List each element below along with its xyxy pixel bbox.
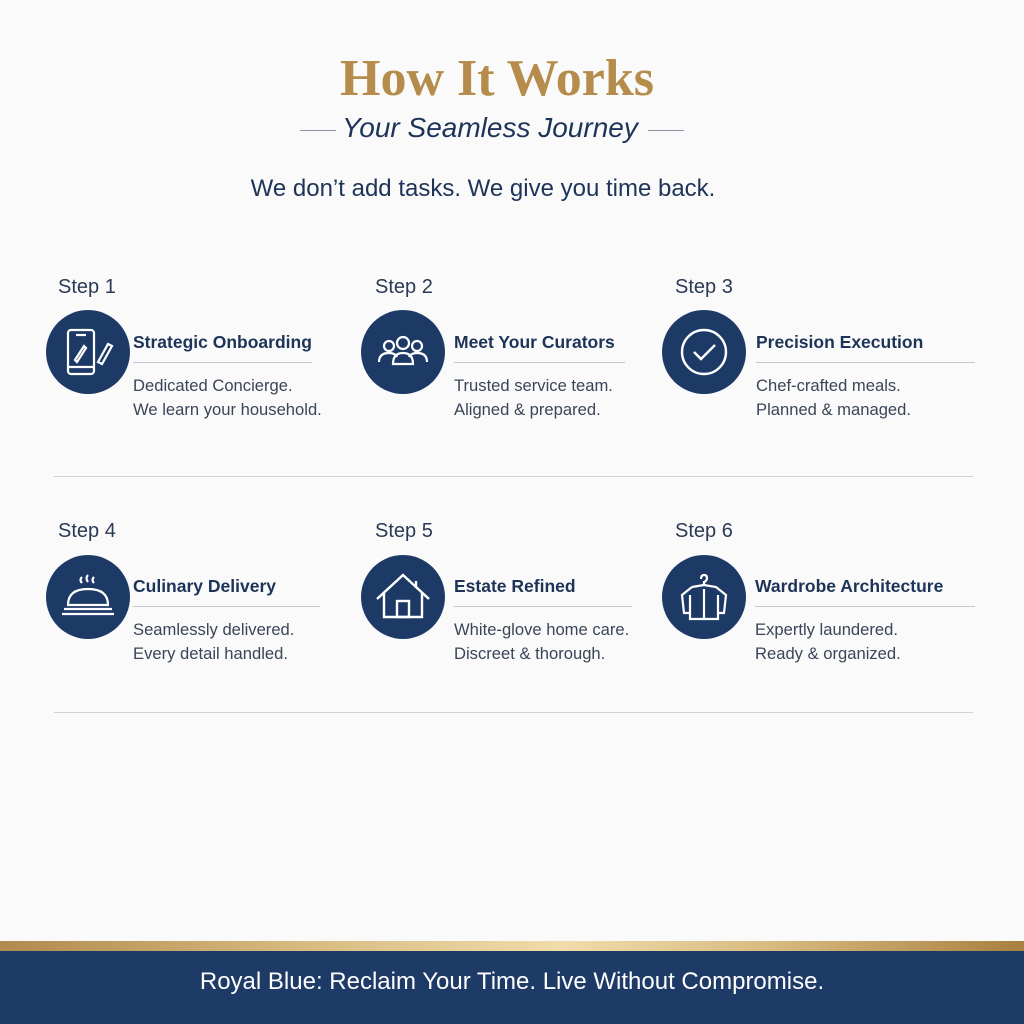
step 1: Step 1 (58, 276, 116, 298)
tagline: We don’t add tasks. We give you time back. (251, 175, 715, 202)
step 4: Seamlessly delivered. (133, 620, 294, 639)
step 2: Step 2 (375, 276, 433, 298)
step 2 (361, 276, 625, 419)
step 4: Step 4 (58, 520, 116, 542)
step 6: Step 6 (675, 520, 733, 542)
step 3 (662, 276, 975, 419)
footer banner: Royal Blue: Reclaim Your Time. Live Without Compromise. (200, 968, 824, 995)
step 1: Strategic Onboarding (133, 332, 312, 352)
title: How It Works (340, 50, 654, 107)
step 4: Culinary Delivery (133, 576, 276, 596)
step 2: Trusted service team. (454, 376, 613, 395)
icon: check (662, 310, 746, 394)
step 3: Step 3 (675, 276, 733, 298)
step 1: We learn your household. (133, 400, 322, 419)
step 6: Wardrobe Architecture (755, 576, 943, 596)
icon: phone and pen (46, 310, 130, 394)
step 4 (46, 520, 320, 663)
footer banner (0, 951, 1024, 1024)
icon: shirt on hanger (662, 555, 746, 639)
step 5: Discreet & thorough. (454, 644, 605, 663)
icon: people (361, 310, 445, 394)
step 2: Meet Your Curators (454, 332, 615, 352)
step 3: Planned & managed. (756, 400, 911, 419)
step 3: Precision Execution (756, 332, 923, 352)
step 6: Expertly laundered. (755, 620, 898, 639)
step 1 (46, 276, 322, 419)
icon: house (361, 555, 445, 639)
step 5: White-glove home care. (454, 620, 629, 639)
icon: cloche (46, 555, 130, 639)
step 2: Aligned & prepared. (454, 400, 601, 419)
footer gold bar (0, 941, 1024, 951)
step 6: Ready & organized. (755, 644, 901, 663)
step 4: Every detail handled. (133, 644, 288, 663)
step 1: Dedicated Concierge. (133, 376, 293, 395)
step 5 (361, 520, 632, 663)
step 5: Step 5 (375, 520, 433, 542)
step 6 (662, 520, 975, 663)
step 3: Chef-crafted meals. (756, 376, 901, 395)
subtitle: Your Seamless Journey (342, 112, 638, 143)
step 5: Estate Refined (454, 576, 576, 596)
